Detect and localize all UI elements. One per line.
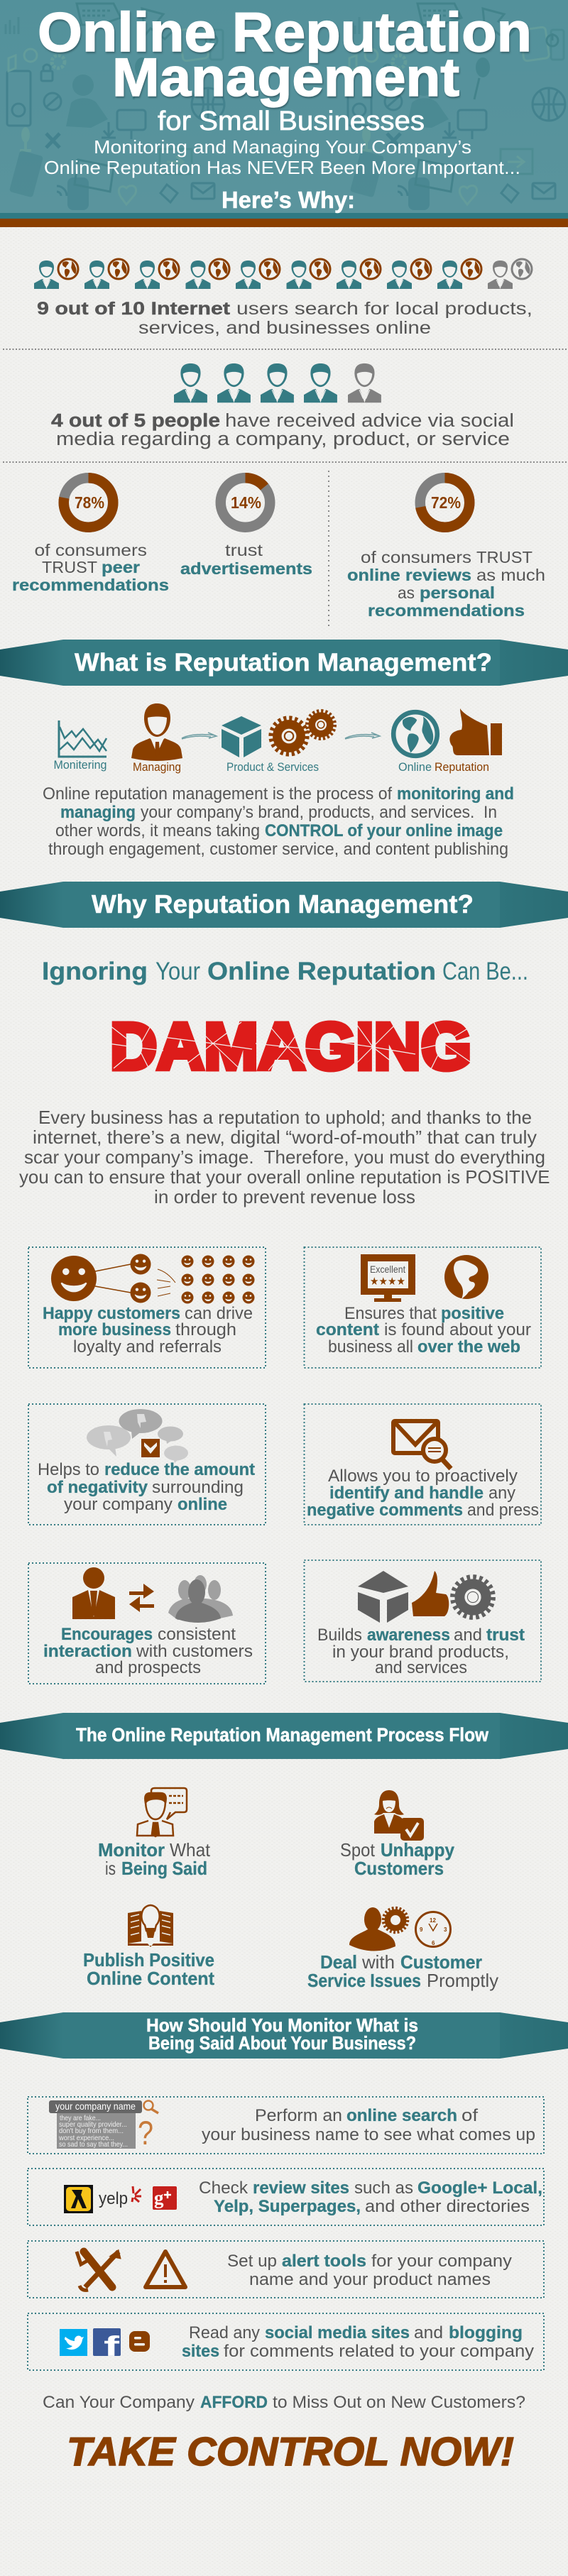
text: identify and handle <box>329 1484 484 1503</box>
label: TRUST <box>476 548 532 566</box>
banner: how should you monitor: How Should You Monitor What is <box>146 2015 418 2036</box>
label: recommendations <box>12 576 169 594</box>
text: for comments related to your company <box>224 2342 534 2361</box>
text: Promptly <box>427 1970 498 1991</box>
banner: how should you monitor: Being Said About Your Business? <box>148 2032 416 2054</box>
text <box>38 1460 255 1514</box>
donut chart <box>420 478 469 527</box>
panel: reduce negativity <box>28 1404 266 1525</box>
icon: monitor review: ★★★★ <box>370 1276 405 1288</box>
text: of <box>462 2106 478 2125</box>
icon: search box: so sad to say that they... <box>59 2140 128 2149</box>
text <box>43 1625 253 1677</box>
text: Set up <box>227 2252 277 2271</box>
icon: google plus <box>153 2186 177 2210</box>
heading: ignoring your online reputation: Can Be... <box>442 958 528 985</box>
definition paragraph: your company’s brand, products, and services. In <box>141 803 497 822</box>
definition paragraph: CONTROL of your online image <box>265 821 503 840</box>
text: Customer <box>400 1951 482 1973</box>
text: Being Said <box>121 1858 207 1879</box>
closing question: AFFORD <box>200 2393 268 2412</box>
definition paragraph: Online reputation management is the process of <box>43 784 392 804</box>
banner: What is Reputation Management?: What is Reputation Management? <box>75 649 492 676</box>
icon: box, thumb, gear <box>358 1571 493 1623</box>
text: blogging <box>449 2323 523 2342</box>
text: is found about your <box>384 1320 531 1339</box>
icon: monitor review <box>361 1254 415 1302</box>
text <box>83 1949 214 1989</box>
label: trust <box>225 541 263 559</box>
text: can drive <box>185 1304 253 1323</box>
label: peer <box>102 558 140 576</box>
stat text: media regarding a company, product, or service <box>56 429 510 449</box>
icon: search box <box>49 2100 158 2152</box>
text: loyalty and referrals <box>73 1337 222 1356</box>
icon: warning triangle <box>146 2252 185 2287</box>
label: as <box>398 583 415 602</box>
text: interaction <box>43 1642 132 1661</box>
heading: ignoring your online reputation: Ignoring <box>42 958 148 985</box>
label: product & services: Product & Services <box>226 761 319 774</box>
icon: thumbs up <box>449 708 502 755</box>
icon: person, gear, clock: 12 <box>430 1917 436 1924</box>
text: Google+ Local, <box>417 2178 542 2198</box>
donut stat: 72% <box>347 478 545 620</box>
donut chart <box>221 478 270 527</box>
icon: search box: ? <box>138 2114 153 2152</box>
text <box>182 2323 534 2361</box>
text: any <box>488 1484 515 1503</box>
icon: yellow pages <box>64 2185 93 2213</box>
icon: envelope and magnifier <box>393 1421 451 1469</box>
icon: book with lightbulb <box>128 1905 173 1947</box>
intro paragraph: scar your company’s image. Therefore, you must do everything <box>24 1146 545 1168</box>
panel: builds awareness <box>304 1560 541 1682</box>
label: advertisements <box>180 559 312 578</box>
process step: publish <box>83 1905 214 1989</box>
intro paragraph: in order to prevent revenue loss <box>154 1186 415 1207</box>
stat text <box>51 411 514 449</box>
icon: search box: your company name <box>55 2100 136 2112</box>
icon: facebook: f <box>104 2331 120 2362</box>
banner: process flow: The Online Reputation Management Process Flow <box>76 1724 489 1745</box>
label: managing: Managing <box>133 761 181 774</box>
panel: encourages interaction <box>28 1563 266 1684</box>
text: in your brand products, <box>332 1643 509 1662</box>
text: your business name to see what comes up <box>202 2125 535 2144</box>
text: social media sites <box>265 2323 410 2342</box>
panel: alert tools <box>28 2241 544 2298</box>
text: online search <box>346 2106 457 2125</box>
icon: person, gear, clock: 3 <box>444 1926 447 1933</box>
text: and services <box>375 1658 467 1677</box>
icon: search box: they are fake... <box>60 2114 101 2122</box>
donut chart <box>64 478 113 527</box>
arrow <box>182 733 217 739</box>
text: surrounding <box>152 1478 244 1497</box>
text <box>199 2178 542 2216</box>
banner: Why Reputation Management?: Why Reputation Management? <box>92 889 474 919</box>
text: is <box>105 1858 116 1879</box>
icon: smileys <box>51 1254 254 1303</box>
text: over the web <box>417 1337 520 1356</box>
stat: 9 out of 10 <box>34 259 532 338</box>
intro paragraph: Every business has a reputation to uphold; and thanks to the <box>38 1107 532 1128</box>
arrow <box>345 733 380 739</box>
stat text: 4 out of 5 people <box>51 411 220 431</box>
icon: person, gear, clock: 6 <box>432 1940 435 1946</box>
tagline: Monitoring and Managing Your Company’s <box>94 136 471 158</box>
label: recommendations <box>368 601 525 620</box>
text: content <box>316 1320 379 1339</box>
process step: deal with issues <box>307 1907 498 1991</box>
here's why: Here’s Why: <box>222 187 355 213</box>
stat: 4 out of 5 <box>51 363 514 449</box>
text: What <box>170 1839 211 1860</box>
definition paragraph: monitoring and <box>397 784 514 804</box>
label: as much <box>476 566 545 584</box>
label: online reputation <box>398 761 489 774</box>
text: with customers <box>136 1642 253 1661</box>
panel: review sites <box>28 2169 544 2225</box>
text: online <box>178 1495 227 1514</box>
definition paragraph: through engagement, customer service, and content publishing <box>48 840 508 859</box>
text: Deal <box>320 1951 357 1973</box>
intro paragraph <box>19 1107 550 1207</box>
panel: online search <box>28 2097 544 2154</box>
label: personal <box>420 583 495 602</box>
definition paragraph: managing <box>60 803 136 822</box>
stat text <box>37 299 532 338</box>
text: reduce the amount <box>104 1460 255 1479</box>
text: name and your product names <box>249 2270 491 2289</box>
text: review sites <box>253 2178 349 2198</box>
text: and prospects <box>95 1658 201 1677</box>
text: Encourages <box>61 1625 153 1644</box>
text: Service Issues <box>307 1970 421 1991</box>
label: online reputation: Online <box>398 761 432 774</box>
stat text: 9 out of 10 Internet <box>37 299 231 319</box>
icon: globe <box>444 1255 488 1299</box>
icon: search box: don't buy from them... <box>59 2127 124 2135</box>
text: more business <box>58 1320 171 1339</box>
panel: identify negative comments <box>304 1404 541 1525</box>
text: Online Content <box>87 1968 214 1989</box>
donut chart: 78% <box>75 493 104 512</box>
text: and <box>454 1626 482 1645</box>
panel: positive content <box>304 1247 541 1368</box>
banner: how should you monitor <box>0 2012 568 2059</box>
text <box>227 2252 512 2289</box>
title: Management <box>112 48 459 108</box>
label <box>12 541 169 594</box>
icon: yelp: yelp <box>99 2189 128 2208</box>
label: TRUST <box>42 558 97 576</box>
text: Happy customers <box>43 1304 180 1323</box>
text <box>307 1951 498 1991</box>
closing question <box>43 2393 525 2412</box>
text: negative comments <box>307 1501 463 1520</box>
process step: monitor <box>98 1788 211 1879</box>
icon row: people <box>174 363 381 402</box>
icon: search box: super quality provider... <box>59 2120 127 2129</box>
text: and other directories <box>365 2197 530 2216</box>
text: through <box>175 1320 236 1339</box>
donut chart: 14% <box>231 493 261 512</box>
icon: product box <box>222 716 261 757</box>
text <box>43 1304 253 1356</box>
text: consistent <box>158 1625 236 1644</box>
panel: happy customers <box>28 1247 266 1368</box>
text: Perform an <box>255 2106 342 2125</box>
intro paragraph: you can to ensure that your overall online reputation is POSITIVE <box>19 1166 550 1188</box>
closing question: Can Your Company <box>43 2393 195 2412</box>
tagline: Online Reputation Has NEVER Been More Important... <box>44 157 520 178</box>
text: Check <box>199 2178 248 2198</box>
text: Publish Positive <box>83 1949 214 1971</box>
title <box>38 1 532 108</box>
label <box>347 548 545 620</box>
text <box>98 1839 211 1879</box>
icon: monitoring chart <box>59 720 106 757</box>
text: Monitor <box>98 1839 165 1860</box>
text <box>340 1839 454 1879</box>
diagram: monitoring to online reputation <box>54 703 502 774</box>
icon: manager <box>131 703 182 761</box>
icon: person with speech box <box>137 1788 187 1836</box>
text: and <box>414 2323 443 2342</box>
text: your company <box>64 1495 173 1514</box>
text: positive <box>441 1304 504 1323</box>
text: Read any <box>189 2323 260 2342</box>
label <box>180 541 312 578</box>
damaging word art: DAMAGING <box>110 1009 471 1083</box>
text <box>307 1467 539 1520</box>
process step: spot unhappy customers <box>340 1790 454 1879</box>
text: Unhappy <box>381 1839 454 1860</box>
definition paragraph <box>43 784 514 859</box>
label: of consumers <box>361 548 471 566</box>
icon: tools <box>77 2250 119 2290</box>
intro paragraph: internet, there’s a new, digital “word-of-mouth” that can truly <box>33 1127 537 1148</box>
icon: globe <box>393 712 437 756</box>
text: Customers <box>354 1858 444 1879</box>
call to action: TAKE CONTROL NOW! <box>67 2429 514 2474</box>
text: Ensures that <box>344 1304 437 1323</box>
stat text: have received advice via social <box>225 411 514 431</box>
header <box>0 0 568 227</box>
banner: What is Reputation Management? <box>0 640 568 686</box>
stat text: services, and businesses online <box>138 318 431 338</box>
text <box>317 1626 525 1677</box>
text: Allows you to proactively <box>328 1467 518 1486</box>
text: and press <box>467 1501 539 1520</box>
definition paragraph: other words, it means taking <box>55 821 260 840</box>
heading: ignoring your online reputation: Your <box>155 958 200 985</box>
icon: gears <box>271 711 335 754</box>
text: Helps to <box>38 1460 99 1479</box>
text: business all <box>328 1337 413 1356</box>
icon: blogger <box>129 2331 150 2352</box>
label: online reputation: Reputation <box>435 761 489 774</box>
donut stat: 78% <box>12 478 169 594</box>
icon: speech bubbles <box>87 1409 188 1463</box>
donut stat: 14% <box>180 478 312 578</box>
label: of consumers <box>34 541 147 559</box>
text: of negativity <box>47 1478 148 1497</box>
heading: ignoring your online reputation <box>42 958 528 985</box>
text <box>202 2106 535 2144</box>
subtitle: for Small Businesses <box>158 106 425 136</box>
text: with <box>361 1951 395 1973</box>
banner: process flow <box>0 1713 568 1759</box>
icon row: people and globes <box>34 259 532 289</box>
banner: Why Reputation Management? <box>0 882 568 928</box>
icon: yelp <box>99 2186 141 2208</box>
icon: person, gear, clock <box>349 1907 450 1951</box>
text: for your company <box>371 2252 512 2271</box>
text: sites <box>182 2342 219 2361</box>
text: Yelp, Superpages, <box>214 2197 361 2216</box>
icon: facebook <box>93 2328 121 2362</box>
stat text: users search for local products, <box>236 299 532 319</box>
icon: person, gear, clock: 9 <box>420 1926 423 1933</box>
text <box>316 1304 531 1356</box>
icon: twitter <box>60 2329 87 2356</box>
label: monitoring: Monitering <box>54 759 106 772</box>
heading: ignoring your online reputation: Online Reputation <box>207 958 436 985</box>
icon: google plus: g <box>154 2187 164 2208</box>
icon: person and group <box>72 1567 233 1623</box>
text: Spot <box>340 1839 376 1860</box>
icon: woman with check <box>374 1790 424 1841</box>
closing question: to Miss Out on New Customers? <box>273 2393 525 2412</box>
text: such as <box>354 2178 413 2198</box>
label: online reviews <box>347 566 471 584</box>
icon: monitor review: Excellent <box>370 1264 405 1275</box>
panel: social media <box>28 2313 544 2370</box>
donut chart: 72% <box>431 493 461 512</box>
text: trust <box>486 1626 525 1645</box>
text: awareness <box>367 1626 450 1645</box>
title: Online Reputation <box>38 1 532 63</box>
text: alert tools <box>282 2252 366 2271</box>
icon: search box: worst experience... <box>58 2134 114 2142</box>
text: Builds <box>317 1626 362 1645</box>
tagline <box>44 136 520 178</box>
